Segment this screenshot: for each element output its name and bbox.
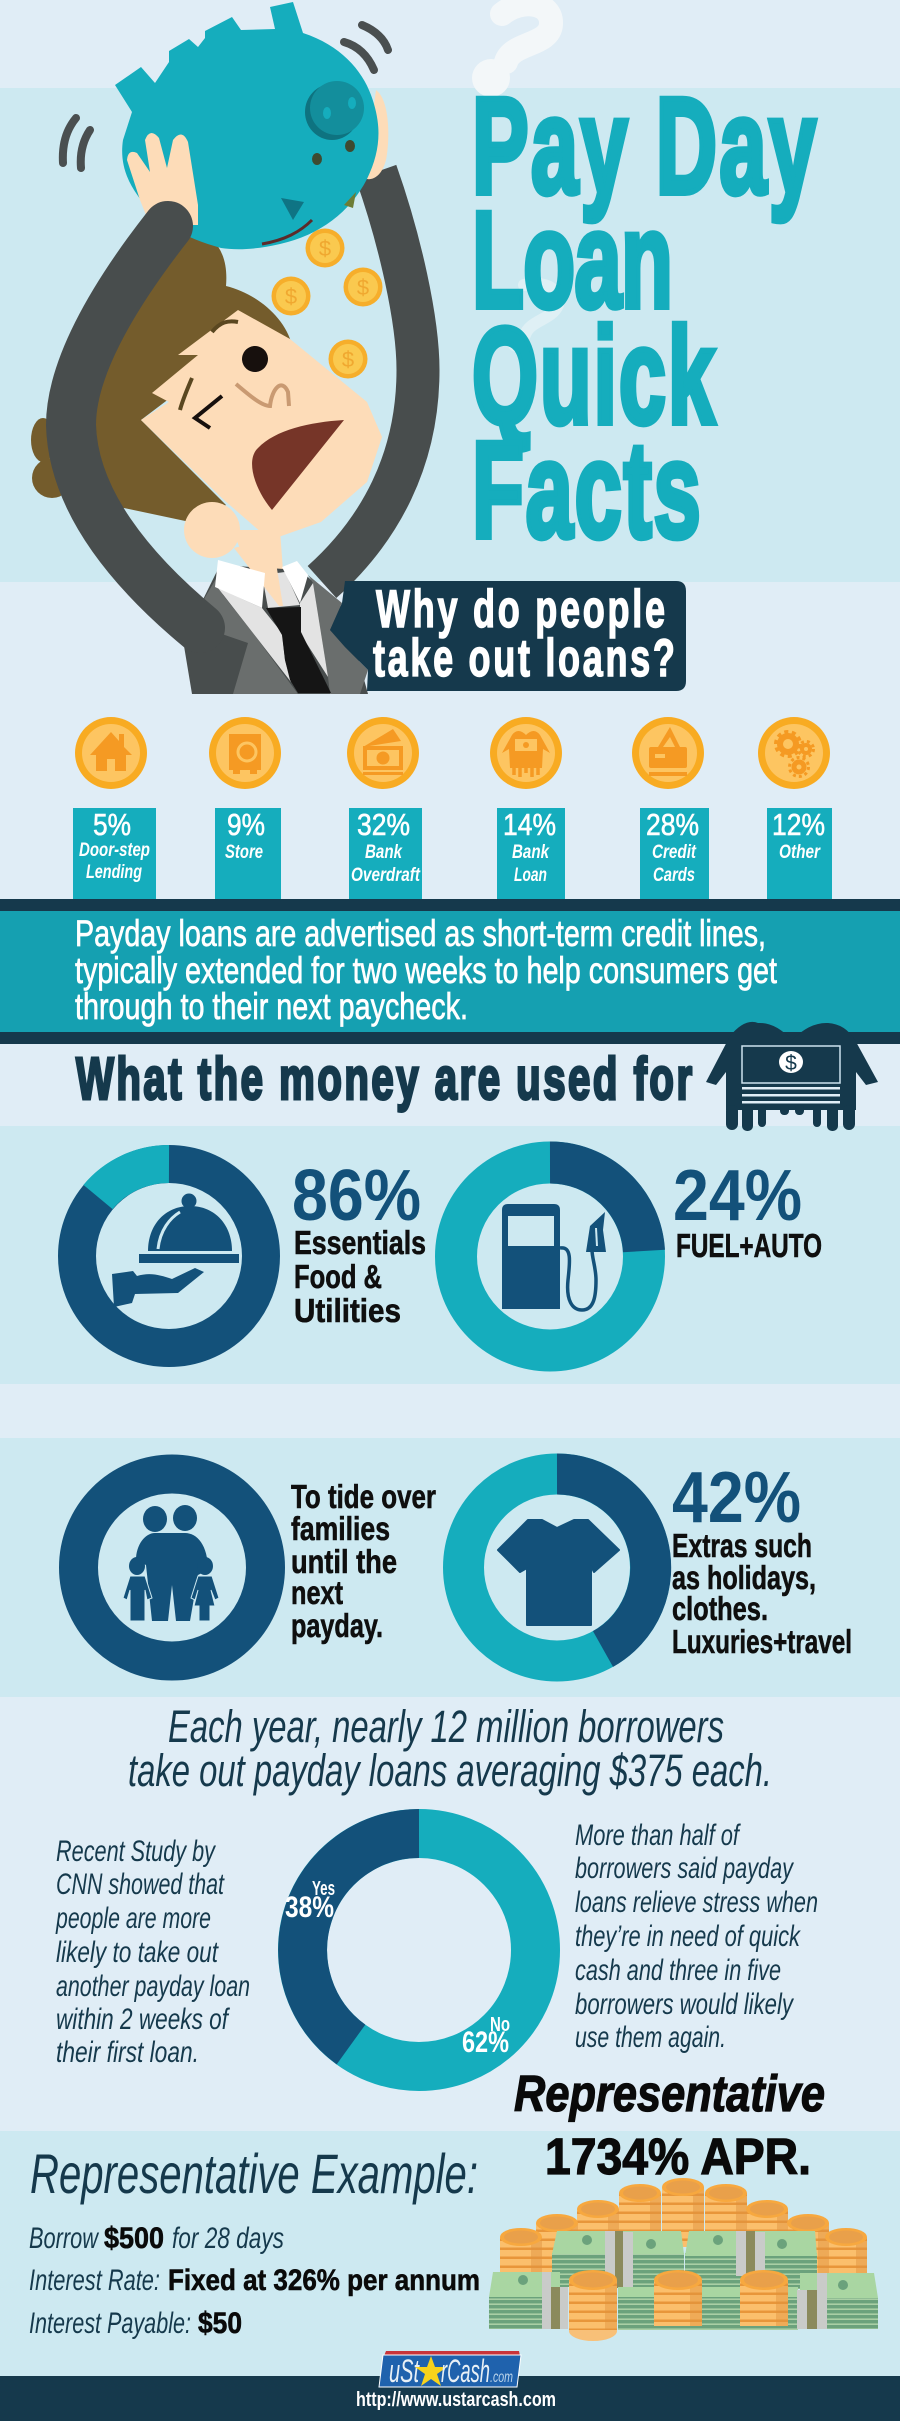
donut chart: 86% (77, 1164, 261, 1348)
panel: fuel (456, 1156, 822, 1350)
piggy bank (115, 2, 378, 249)
icon: gears coin (758, 717, 830, 789)
panel: essentials (77, 1156, 426, 1348)
bars and labels: 32% (357, 807, 410, 842)
label: tide over families: To tide over (291, 1478, 436, 1515)
example details: $50 (198, 2307, 242, 2340)
hair (90, 228, 292, 522)
text: recent study (55, 1835, 250, 2069)
teal banner: through to their next paycheck. (75, 986, 468, 1027)
text: recent study: within 2 weeks of (56, 2003, 230, 2036)
logo: uStarCash: uSt (389, 2353, 420, 2389)
logo: uStarCash (379, 2351, 521, 2389)
icon: hands holding money: $ (785, 1052, 797, 1075)
text: more than half: borrowers said payday (575, 1852, 794, 1885)
icon: fuel pump (502, 1204, 606, 1310)
example details: Interest Payable: (29, 2307, 191, 2340)
icon: safe coin (209, 717, 281, 789)
example details: Borrow (29, 2222, 100, 2255)
bars and labels: 12% (772, 807, 825, 842)
illustration: money pile (489, 2178, 878, 2341)
bars and labels: Credit (652, 842, 697, 863)
label: fuel and auto: FUEL+AUTO (676, 1227, 822, 1264)
donut chart: yes 38 no 62: Yes (312, 1878, 335, 1900)
icon: hands holding money (706, 1022, 878, 1131)
label: extras: as holidays, (672, 1559, 816, 1596)
bars and labels: Store (225, 842, 263, 863)
bars and labels: Loan (514, 865, 547, 886)
icon: t-shirt (498, 1520, 619, 1625)
bars and labels: Bank (512, 842, 550, 863)
bars and labels: Lending (86, 862, 142, 883)
front coin stacks (569, 2270, 788, 2341)
motion lines (63, 25, 388, 168)
falling coins: $ (357, 275, 369, 300)
label: essentials: Food & (294, 1258, 382, 1295)
stat: 42%: 42% (672, 1458, 801, 1538)
example details: $500 (104, 2222, 164, 2255)
falling coins: $ (319, 236, 331, 261)
example details: Interest Rate: (29, 2264, 160, 2297)
donut chart: families (78, 1474, 266, 1661)
example details: for 28 days (172, 2222, 284, 2255)
left arm (71, 226, 200, 628)
logo: uStarCash: .com (490, 2369, 513, 2386)
example details: Fixed at 326% per annum (168, 2264, 480, 2297)
icon: family (123, 1505, 219, 1621)
title: Pay Day (472, 70, 816, 223)
text: more than half (575, 1819, 818, 2054)
stat: 24%: 24% (673, 1156, 802, 1236)
neck (232, 530, 286, 612)
ear (184, 502, 240, 558)
bars and labels: Door-step (79, 840, 150, 861)
label: essentials: Utilities (294, 1292, 401, 1329)
bars and labels: Cards (653, 865, 695, 886)
label: essentials (294, 1224, 426, 1329)
stat: 86%: 86% (292, 1156, 421, 1236)
panel: families (78, 1474, 436, 1661)
heading: representative 1734% APR: Representative (514, 2065, 825, 2122)
right hand (364, 90, 388, 179)
donut chart: 42% (464, 1474, 651, 1661)
icon: cash coin (347, 717, 419, 789)
text: more than half: More than half of (575, 1819, 741, 1852)
text: more than half: use them again. (575, 2021, 726, 2054)
title: Loan (472, 184, 673, 337)
icon: cloche and hand (112, 1194, 239, 1307)
bars and labels: Overdraft (351, 865, 421, 886)
bars and labels: 5% (93, 807, 131, 842)
falling coins: $ (342, 347, 354, 372)
falling coins (272, 228, 382, 378)
panel: extras (464, 1458, 852, 1661)
text: more than half: they’re in need of quick (575, 1920, 801, 1953)
falling coins: $ (285, 284, 297, 309)
text: recent study: likely to take out (56, 1936, 219, 1969)
subheading: twelve million borrowers (128, 1701, 772, 1796)
bars and labels: Other (779, 842, 821, 863)
text: more than half: cash and three in five (575, 1954, 781, 1987)
heading: representative 1734% APR: 1734% APR. (545, 2128, 811, 2185)
url: http://www.ustarcash.com (356, 2389, 556, 2411)
bars and labels: 14% (503, 807, 556, 842)
hair tuft (31, 418, 55, 462)
callout: why do people take out loans: Why do people (376, 579, 665, 639)
text: recent study: people are more (55, 1902, 211, 1935)
illustration: man shaking piggy bank (31, 2, 418, 694)
label: tide over families: payday. (291, 1607, 383, 1644)
right arm (322, 172, 418, 582)
bars and labels: 28% (646, 807, 699, 842)
title: Quick (472, 300, 715, 453)
background question marks (472, 4, 559, 352)
label: essentials: Essentials (294, 1224, 426, 1261)
label: extras: clothes. (672, 1590, 768, 1627)
left hand (127, 133, 198, 225)
bars and labels: 9% (227, 807, 265, 842)
suit (183, 538, 368, 694)
donut chart: yes 38 no 62: 38% (285, 1891, 334, 1924)
heading: representative example: Representative Example: (30, 2142, 478, 2205)
icon: credit card coin (632, 717, 704, 789)
front bill bundles (489, 2272, 878, 2330)
bars and labels (73, 807, 832, 900)
footer bar (0, 2376, 900, 2421)
heading: representative 1734% APR (514, 2065, 825, 2185)
donut chart: 24% (456, 1162, 644, 1350)
label: tide over families (291, 1478, 436, 1644)
donut chart: yes 38 no 62 (285, 1834, 536, 2066)
callout: why do people take out loans (330, 579, 686, 691)
label: tide over families: next (291, 1574, 343, 1611)
label: tide over families: until the (291, 1543, 397, 1580)
callout: why do people take out loans: take out loans? (373, 628, 675, 688)
icon: bank loan hands coin (490, 717, 562, 789)
mouth (252, 420, 344, 510)
title (472, 70, 816, 567)
text: recent study: their first loan. (56, 2036, 199, 2069)
label: extras (672, 1527, 852, 1660)
text: recent study: CNN showed that (56, 1868, 225, 1901)
icon: house coin (75, 717, 147, 789)
logo: uStarCash: rCash (441, 2353, 490, 2389)
donut chart: yes 38 no 62: 62% (462, 2026, 509, 2059)
reasons row (73, 717, 832, 900)
teal banner (0, 899, 900, 1044)
heading: what the money are used for: What the money are used for (76, 1045, 692, 1112)
text: recent study: another payday loan (56, 1970, 250, 2003)
label: extras: Extras such (672, 1527, 812, 1564)
label: tide over families: families (291, 1510, 390, 1547)
rear coin stacks (500, 2178, 867, 2275)
rear bill bundles (552, 2231, 817, 2289)
donut chart: yes 38 no 62: No (490, 2014, 510, 2036)
example details (29, 2222, 480, 2340)
face (141, 310, 382, 540)
text: recent study: Recent Study by (56, 1835, 216, 1868)
text: more than half: borrowers would likely (575, 1988, 794, 2021)
title: Facts (472, 414, 701, 567)
bars and labels: Bank (365, 842, 403, 863)
